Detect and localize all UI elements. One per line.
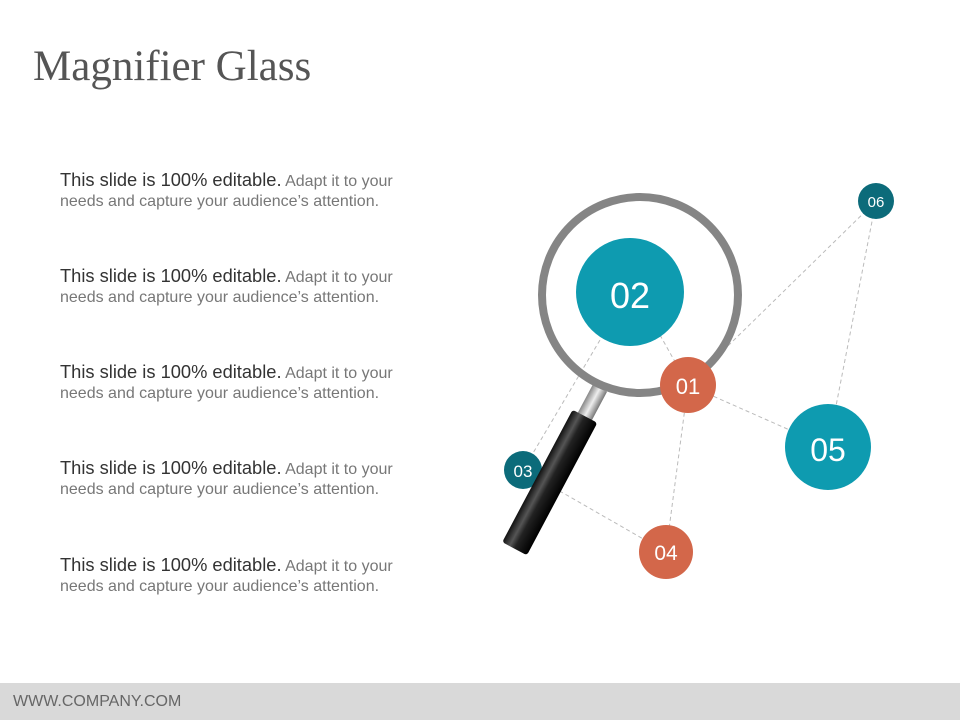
text block 3: This slide is 100% editable. Adapt it to your (60, 361, 393, 382)
text block 3: needs and capture your audience’s attention. (60, 385, 379, 402)
text block 1: needs and capture your audience’s attention. (60, 193, 379, 210)
magnifier handle (502, 381, 612, 555)
circle 01: 01 (676, 374, 700, 399)
text block 4: This slide is 100% editable. Adapt it to your (60, 457, 393, 478)
circle 01 (660, 357, 716, 413)
text block 1 (60, 169, 393, 210)
circle 02 (576, 238, 684, 346)
text block 4 (60, 457, 393, 498)
footer (0, 683, 960, 720)
circle 04: 04 (654, 542, 678, 565)
circle 06: 06 (868, 194, 884, 211)
circle 05: 05 (810, 432, 846, 468)
circle 06 (858, 183, 894, 219)
text block 1: This slide is 100% editable. Adapt it to your (60, 169, 393, 190)
text block 5: needs and capture your audience’s attention. (60, 578, 379, 595)
footer: WWW.COMPANY.COM (13, 693, 181, 710)
magnifier ring (542, 197, 738, 393)
text block 2 (60, 265, 393, 306)
circle 05 (785, 404, 871, 490)
circle 02: 02 (610, 275, 650, 316)
text block 4: needs and capture your audience’s attention. (60, 481, 379, 498)
text block 3 (60, 361, 393, 402)
circle 04 (639, 525, 693, 579)
text block 2: This slide is 100% editable. Adapt it to your (60, 265, 393, 286)
text block 2: needs and capture your audience’s attention. (60, 289, 379, 306)
text block 5 (60, 554, 393, 595)
circle 03: 03 (514, 462, 532, 481)
title: Magnifier Glass (33, 43, 311, 90)
circle 03 (504, 451, 542, 489)
text block 5: This slide is 100% editable. Adapt it to your (60, 554, 393, 575)
connector lines (523, 201, 876, 552)
